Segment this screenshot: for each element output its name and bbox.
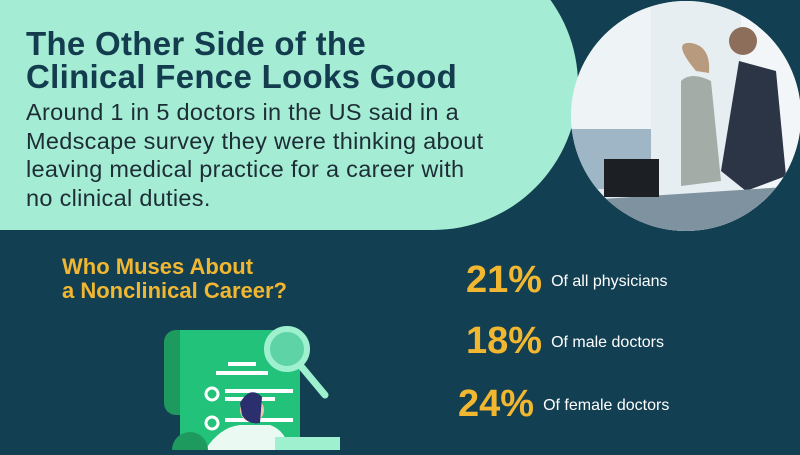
intro text: Around 1 in 5 doctors in the US said in a [26, 99, 459, 125]
stat: 24%: 24% Of female doctors [458, 383, 669, 425]
intro text: no clinical duties. [26, 185, 211, 211]
intro text [26, 99, 483, 211]
intro text: leaving medical practice for a career with [26, 156, 464, 182]
stat: 18%: 18% Of male doctors [466, 320, 664, 362]
intro text: Medscape survey they were thinking about [26, 128, 483, 154]
subheading [62, 254, 287, 303]
subheading: a Nonclinical Career? [62, 278, 287, 303]
subheading: Who Muses About [62, 254, 253, 279]
title [26, 25, 457, 95]
title: The Other Side of the [26, 25, 366, 62]
header panel [0, 0, 578, 230]
photo circle [571, 1, 800, 231]
illustration: document with magnifier and doctor [164, 326, 340, 450]
stat: 21%: 21% Of all physicians [466, 259, 668, 301]
title: Clinical Fence Looks Good [26, 58, 457, 95]
